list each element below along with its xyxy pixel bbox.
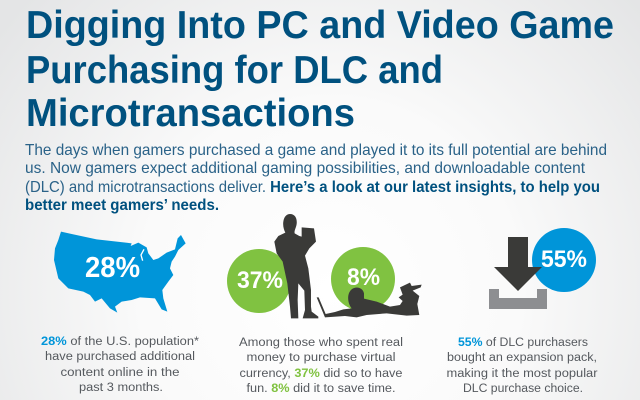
stat: 28%: 28% [85,252,140,284]
caption [239,337,403,395]
icon: map of the United States [54,232,186,313]
icon: blue circle [532,228,596,292]
panel: expansion pack stat [446,228,598,395]
title: Digging Into PC and Video Game [26,4,614,47]
icon: green circle 8% [331,247,395,311]
caption: content online in the [60,367,180,379]
caption: money to purchase virtual [246,352,396,364]
caption: bought an expansion pack, [447,352,597,364]
intro text: us. Now gamers expect additional gaming possibilities, and downloadable content [25,160,586,177]
caption: making it the most popular [446,368,598,380]
caption: have purchased additional [45,351,195,363]
icon: green circle 37% [227,249,291,313]
caption [446,337,598,395]
caption: Among those who spent real [239,337,403,349]
caption: 55% of DLC purchasers [458,337,588,349]
caption: 28% of the U.S. population* [41,336,200,348]
icon: download arrow [494,237,542,291]
intro text: (DLC) and microtransactions deliver. Here’s a look at our latest insights, to help you [25,179,600,196]
caption: DLC purchase choice. [463,383,583,395]
icon: download tray [489,289,547,309]
stat: 37%: 37% [237,267,283,294]
intro text: The days when gamers purchased a game and played it to its full potential are behind [25,142,607,159]
stat: 55%: 55% [541,246,587,273]
intro text [25,142,607,214]
title: Purchasing for DLC and [26,49,443,92]
caption [41,336,200,394]
icon: standing gamer silhouette [274,214,318,318]
title: Microtransactions [26,92,355,135]
panel: virtual currency stat [227,214,422,395]
caption: fun. 8% did it to save time. [246,383,396,395]
intro text: better meet gamers’ needs. [25,197,219,214]
panel: US population stat [41,232,200,394]
caption: currency, 37% did so to have [240,368,402,380]
title [26,4,614,135]
icon: lying child with laptop silhouette [317,283,422,317]
caption: past 3 months. [79,382,163,394]
stat: 8%: 8% [347,264,380,291]
